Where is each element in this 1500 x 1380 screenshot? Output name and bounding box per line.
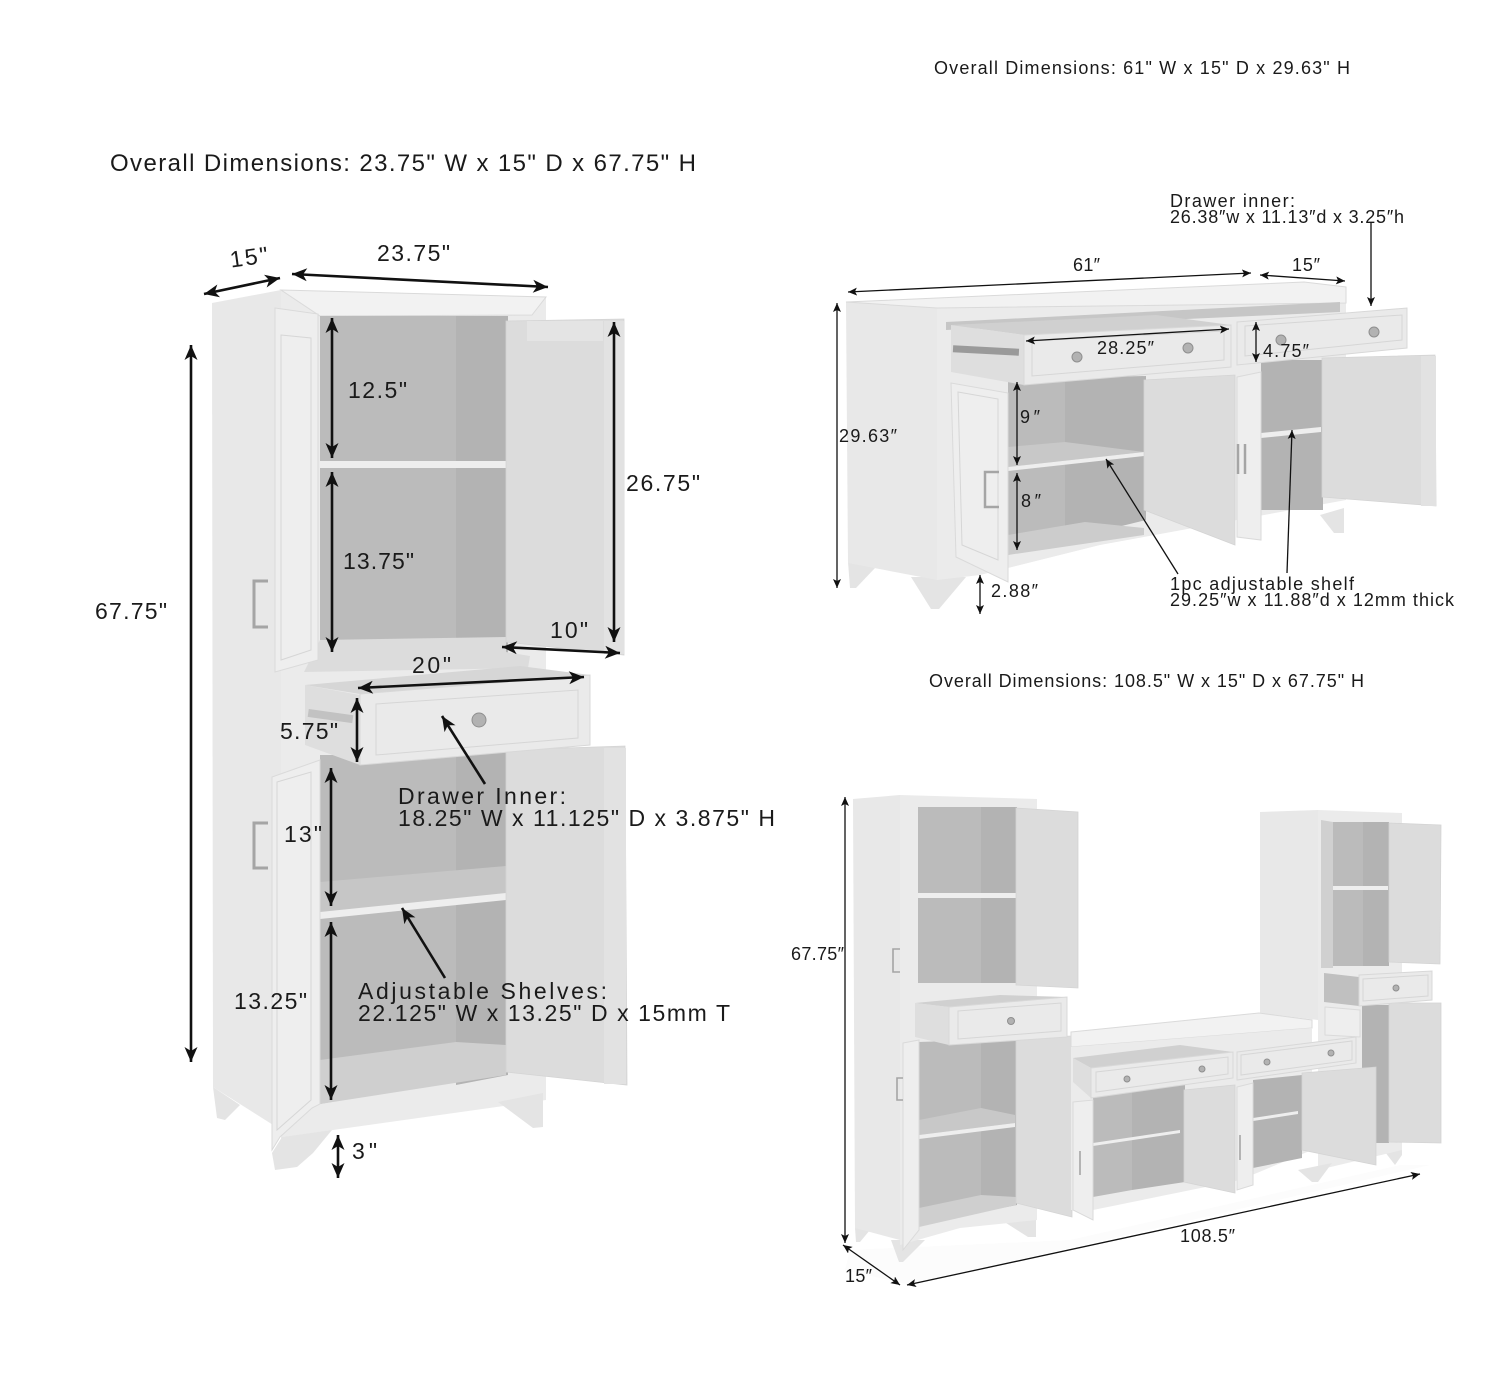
callout: console drawer inner — [1170, 191, 1404, 227]
interior left bay — [1008, 376, 1146, 555]
lower right door — [506, 746, 627, 1085]
console drawers — [951, 308, 1407, 385]
panel: tall pantry cabinet diagram — [212, 290, 627, 1170]
dimension labels: pantry: 15" — [228, 241, 269, 273]
dimension labels: pantry: 67.75" — [95, 598, 167, 624]
left tower — [853, 795, 1078, 1262]
upper left door — [275, 308, 318, 672]
dimension labels: full set: 67.75″ — [791, 944, 845, 964]
cabinet body — [212, 290, 546, 1170]
panel: full set diagram — [845, 795, 1441, 1285]
dimension labels: pantry: 23.75" — [377, 240, 450, 266]
lower left door — [272, 760, 320, 1150]
dimension labels: console — [839, 255, 1321, 601]
dimension labels: console: 15″ — [1292, 255, 1321, 275]
dimension labels: pantry: 26.75" — [626, 470, 700, 496]
callout: adjustable shelves: Adjustable Shelves: — [358, 978, 607, 1004]
dimension labels: pantry: 5.75" — [280, 718, 338, 744]
dimension labels: full set: 15″ — [845, 1266, 873, 1286]
console doors — [951, 355, 1436, 582]
heading: console overall dimensions: Overall Dimensions: 61" W x 15" D x 29.63" H — [934, 58, 1350, 78]
dimension labels: full set — [791, 944, 1236, 1286]
lower interior with shelf — [320, 750, 508, 1104]
callout: console adjustable shelf: 1pc adjustable shelf — [1170, 574, 1355, 594]
dimension labels: console: 4.75″ — [1263, 341, 1310, 361]
dimension labels: pantry: 20" — [412, 652, 451, 678]
callout: drawer inner: 18.25" W x 11.125" D x 3.875" H — [398, 805, 775, 831]
dimension labels: console: 8″ — [1021, 491, 1042, 511]
dimension labels: console: 9″ — [1020, 407, 1041, 427]
open drawer — [305, 666, 590, 765]
callout: adjustable shelves: 22.125" W x 13.25" D x 15mm T — [358, 1000, 730, 1026]
panel: console cabinet diagram — [846, 282, 1436, 609]
dimension labels: full set: 108.5″ — [1180, 1226, 1236, 1246]
dimension labels: pantry: 12.5" — [348, 377, 407, 403]
center console — [1071, 1013, 1376, 1220]
dimension arrows: pantry — [191, 274, 620, 1178]
dimension labels: pantry — [95, 240, 700, 1164]
interior right bay — [1261, 360, 1323, 510]
callout: adjustable shelves — [358, 978, 730, 1026]
lower handle — [254, 823, 268, 868]
callout: drawer inner: Drawer Inner: — [398, 783, 566, 809]
dimension labels: console: 2.88″ — [991, 581, 1039, 601]
dimension labels: pantry: 3" — [352, 1138, 377, 1164]
callout: console drawer inner: 26.38″w x 11.13″d x 3.25″h — [1170, 207, 1404, 227]
upper handle — [254, 581, 268, 627]
dimension labels: console: 29.63″ — [839, 426, 898, 446]
heading: set overall dimensions: Overall Dimensions: 108.5" W x 15" D x 67.75" H — [929, 671, 1364, 691]
callout: console drawer inner: Drawer inner: — [1170, 191, 1295, 211]
heading: pantry overall dimensions: Overall Dimensions: 23.75" W x 15" D x 67.75" H — [110, 150, 696, 177]
dimension labels: console: 61″ — [1073, 255, 1101, 275]
upper right door — [506, 319, 624, 655]
upper interior with shelf — [304, 316, 530, 672]
dimension labels: pantry: 10" — [550, 617, 588, 643]
right tower — [1260, 810, 1441, 1170]
dimension labels: pantry: 13.25" — [234, 988, 307, 1014]
dimension arrows: full set — [843, 797, 1420, 1285]
dimension labels: pantry: 13.75" — [343, 548, 414, 574]
callout: console adjustable shelf — [1170, 574, 1455, 610]
dimension arrows: console — [837, 222, 1371, 614]
console handles — [985, 444, 1245, 507]
dimension labels: pantry: 13" — [284, 821, 322, 847]
callout: drawer inner — [398, 783, 775, 831]
dimension labels: console: 28.25″ — [1097, 338, 1155, 358]
callout: console adjustable shelf: 29.25″w x 11.88″d x 12mm thick — [1170, 590, 1455, 610]
console body — [846, 282, 1346, 609]
